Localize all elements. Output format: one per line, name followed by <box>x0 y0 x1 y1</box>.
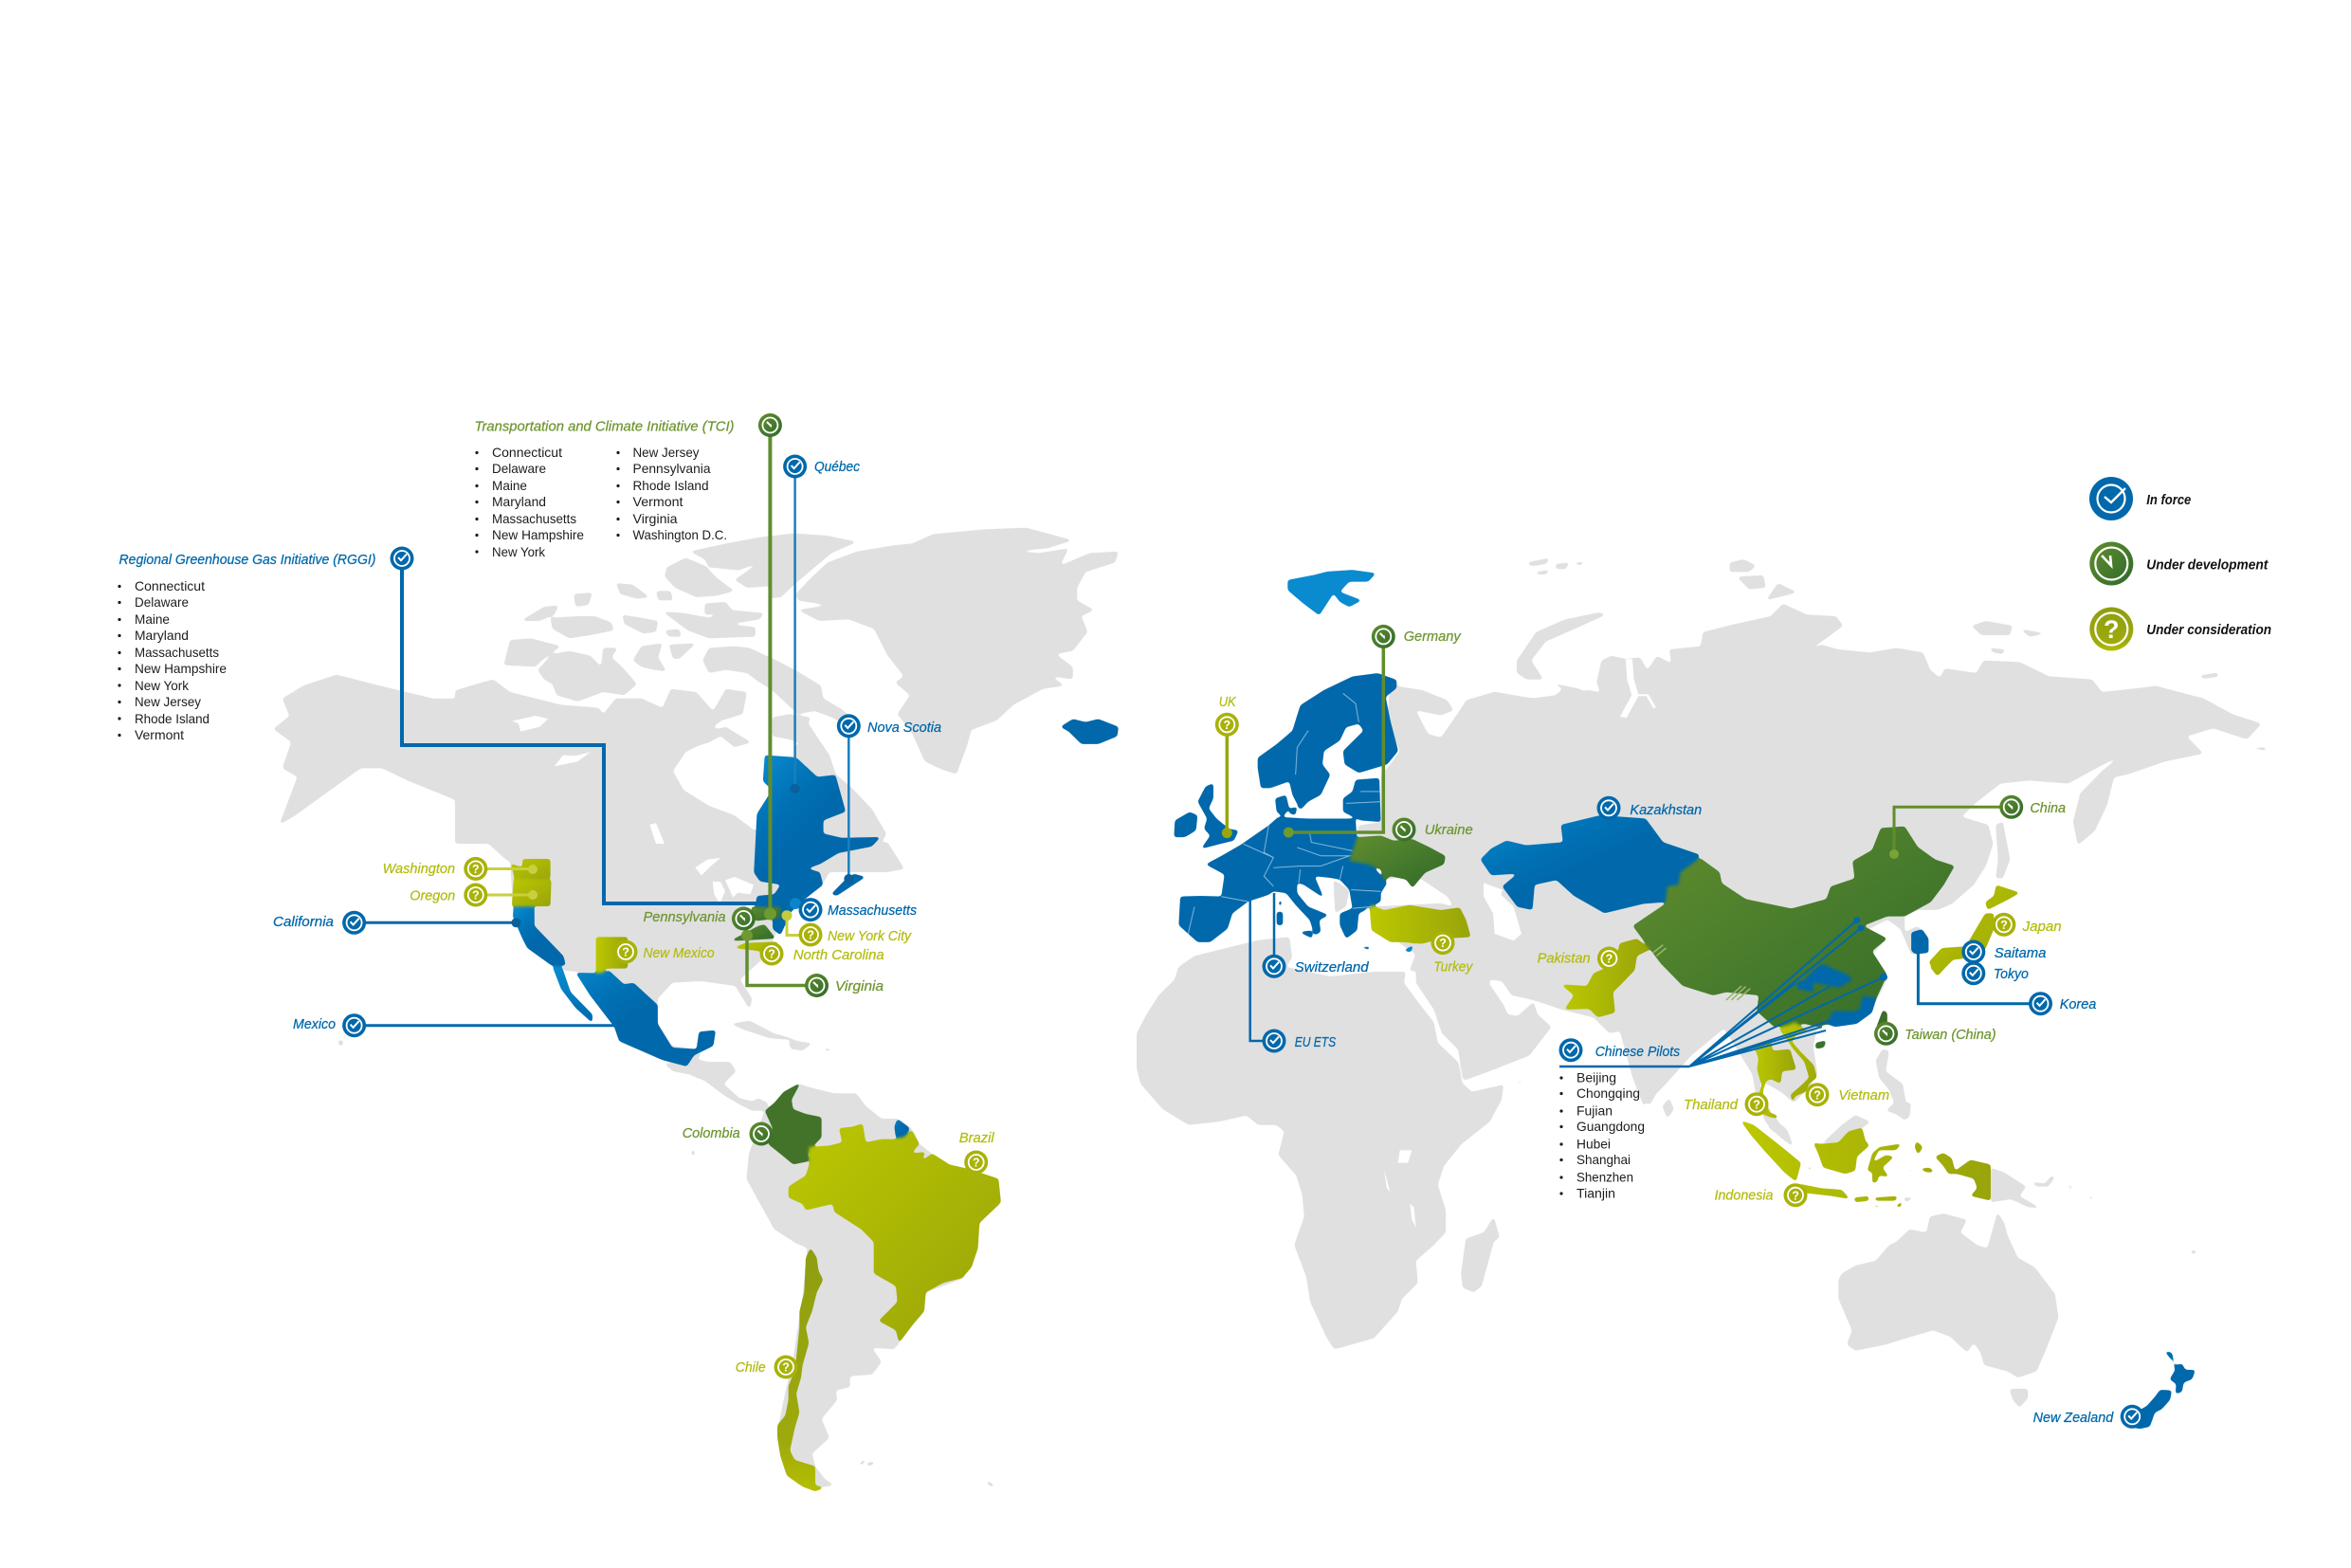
callout: New Zealand: New Zealand <box>2033 1410 2114 1426</box>
callout: Vietnam: Vietnam <box>1838 1087 1889 1103</box>
TCI member list: New Jersey <box>633 445 700 460</box>
callout: Turkey <box>1431 931 1474 975</box>
callout: Oregon: Oregon <box>410 887 455 904</box>
callout: Switzerland <box>1263 893 1369 978</box>
callout: Thailand: Thailand <box>1684 1097 1739 1113</box>
callout: Washington: Washington <box>383 861 455 877</box>
callout: Korea <box>1918 953 2096 1015</box>
region: China <box>1632 827 1955 1049</box>
callout: New Mexico: New Mexico <box>643 945 715 961</box>
TCI member list: Maine <box>492 478 527 493</box>
region: Quebec <box>754 756 881 885</box>
callout: EU ETS <box>1250 896 1336 1052</box>
callout: Saitama: Saitama <box>1995 945 2046 961</box>
callout: UK: UK <box>1219 694 1237 710</box>
callout: New Zealand <box>2033 1405 2144 1429</box>
region: Chile <box>777 1248 825 1491</box>
TCI member list: Washington D.C. <box>633 527 727 542</box>
highlighted regions <box>510 570 2196 1491</box>
callout: Massachusetts: Massachusetts <box>828 903 917 919</box>
region: Korea <box>1911 929 1928 955</box>
callout: Japan: Japan <box>2022 919 2062 935</box>
callout: Quebec: Québec <box>814 459 860 475</box>
RGGI member list: New Hampshire <box>135 661 227 676</box>
callout: Regional Greenhouse Gas Initiative: Regional Greenhouse Gas Initiative (RGGI) <box>119 552 375 568</box>
region: New Mexico <box>596 937 628 974</box>
region: Brazil <box>789 1123 1001 1343</box>
legend: under development <box>2089 542 2269 586</box>
legend: under consideration <box>2089 607 2271 650</box>
region: Vietnam <box>1779 1022 1817 1103</box>
disputed area hatching <box>1653 945 1750 1000</box>
callout: Taiwan (China) <box>1874 1022 1996 1046</box>
callout: Brazil <box>959 1130 994 1174</box>
region: UK <box>1174 783 1239 849</box>
callout: Chile: Chile <box>736 1359 766 1376</box>
RGGI member list: Maine <box>135 611 170 627</box>
world map: grey land masses <box>273 528 2267 1488</box>
RGGI member list: Maryland <box>135 628 189 643</box>
region: Thailand <box>1754 1041 1796 1119</box>
RGGI member list: Rhode Island <box>135 711 210 726</box>
legend: in force <box>2089 477 2191 520</box>
region: Pennsylvania <box>751 907 780 921</box>
region: California <box>513 907 566 965</box>
lakes and inland seas <box>512 716 1522 1228</box>
regions in force: Europe, EU ETS <box>1178 570 1414 953</box>
callout: Japan <box>1992 913 2062 937</box>
callout: Kazakhstan <box>1596 796 1702 820</box>
Chinese pilots list: Beijing <box>1576 1069 1616 1085</box>
region: Taiwan <box>1876 1010 1894 1043</box>
RGGI member list: Connecticut <box>135 578 205 593</box>
callout: Pennsylvania <box>643 906 756 931</box>
Ob and Yenisei estuaries <box>1623 659 1654 718</box>
region: Indonesia <box>1740 1121 1991 1209</box>
region: Iceland <box>1060 719 1119 744</box>
region: Colombia <box>765 1083 822 1173</box>
TCI member list: Vermont <box>633 494 683 509</box>
TCI member list: Delaware <box>492 461 546 476</box>
callout: Vietnam <box>1805 1083 1889 1106</box>
region: Kazakhstan <box>1480 815 1700 913</box>
region: North Carolina <box>733 941 779 960</box>
callout: Indonesia <box>1714 1183 1807 1207</box>
RGGI member list: New Jersey <box>135 694 201 709</box>
callout: Colombia: Colombia <box>683 1125 740 1141</box>
callout: Korea: Korea <box>2060 996 2096 1012</box>
RGGI member list: Vermont <box>135 727 184 742</box>
callout: China: China <box>2030 800 2066 816</box>
callout: Turkey: Turkey <box>1433 959 1474 975</box>
callout: California <box>273 911 521 935</box>
region: Mexico <box>553 966 716 1067</box>
legend: under consideration: Under consideration <box>2146 622 2271 638</box>
TCI member list: Connecticut <box>492 445 562 460</box>
TCI member list: New York <box>492 544 546 559</box>
callout: Chinese Pilots <box>1558 917 1887 1067</box>
callout: New Mexico <box>614 940 715 963</box>
callout: Chinese Pilots: Chinese Pilots <box>1595 1044 1681 1060</box>
region: Nova Scotia <box>831 874 866 896</box>
callout: Nova Scotia: Nova Scotia <box>867 720 941 736</box>
legend: in force: In force <box>2146 492 2191 508</box>
callout: Brazil: Brazil <box>959 1130 994 1146</box>
callout: Thailand <box>1684 1092 1769 1116</box>
region: New England and RGGI states <box>756 869 823 936</box>
callout: Oregon <box>410 884 538 906</box>
region: Washington <box>510 859 551 882</box>
callout: Nova Scotia <box>837 714 941 884</box>
legend: under consideration: ? <box>2104 615 2120 644</box>
callout: Virginia: Virginia <box>835 978 884 994</box>
TCI member list: Rhode Island <box>633 478 709 493</box>
legend <box>2089 477 2271 650</box>
callout: Ukraine <box>1392 817 1473 842</box>
Chinese pilots list: Fujian <box>1576 1103 1613 1119</box>
callout: Tokyo <box>1961 961 2029 985</box>
callout: Transportation and Climate Initiative: Transportation and Climate Initiative (TCI) <box>474 419 735 434</box>
RGGI member list: Massachusetts <box>135 645 219 660</box>
callout: New York City: New York City <box>828 928 912 944</box>
callout: Quebec <box>783 455 860 793</box>
region: Japan <box>1928 884 2020 976</box>
region: Turkey <box>1370 905 1471 944</box>
callout: Pakistan: Pakistan <box>1538 950 1591 967</box>
Chinese pilots list: Guangdong <box>1576 1119 1645 1134</box>
Chinese pilots list: Tianjin <box>1576 1185 1615 1200</box>
callout: UK <box>1215 694 1239 838</box>
callout: Indonesia: Indonesia <box>1714 1187 1773 1204</box>
callout: Switzerland: Switzerland <box>1295 959 1369 975</box>
callout: Colombia <box>683 1122 774 1145</box>
TCI member list: New Hampshire <box>492 527 584 542</box>
callout: Virginia <box>741 930 884 997</box>
callout: North Carolina <box>760 942 884 965</box>
callout: New York City <box>781 910 912 946</box>
callout: China <box>1889 795 2066 859</box>
region: Oregon <box>512 879 552 906</box>
callout: Mexico: Mexico <box>293 1016 336 1032</box>
callout: Regional Greenhouse Gas Initiative <box>119 546 801 909</box>
TCI member list <box>475 445 727 559</box>
region: Chinese pilot provinces <box>1795 964 1876 1027</box>
Chinese pilots list: Hubei <box>1576 1136 1611 1151</box>
TCI member list: Virginia <box>633 511 678 526</box>
region: Virginia <box>732 924 775 941</box>
RGGI member list: Delaware <box>135 594 189 610</box>
region: French Guiana <box>894 1119 910 1138</box>
callout: Massachusetts <box>798 898 917 921</box>
callout: EU ETS: EU ETS <box>1295 1034 1336 1050</box>
callout: Tokyo: Tokyo <box>1994 966 2029 982</box>
callout: Washington <box>383 857 538 881</box>
callout: Ukraine: Ukraine <box>1425 822 1473 838</box>
callout: Pakistan <box>1538 946 1621 971</box>
callout: Pennsylvania: Pennsylvania <box>643 909 726 925</box>
callout: North Carolina: North Carolina <box>793 947 884 963</box>
callout: Mexico <box>293 1013 614 1037</box>
region: New Zealand <box>2123 1351 2196 1429</box>
callout: Germany <box>1284 625 1462 838</box>
RGGI member list: New York <box>135 678 190 693</box>
callout: Kazakhstan: Kazakhstan <box>1630 802 1702 818</box>
callout: Saitama <box>1961 940 2046 963</box>
TCI member list: Maryland <box>492 494 546 509</box>
callout: Taiwan (China): Taiwan (China) <box>1904 1027 1996 1043</box>
Chinese pilots list <box>1559 1069 1645 1200</box>
Chinese pilots list: Chongqing <box>1576 1085 1640 1101</box>
TCI member list: Pennsylvania <box>633 461 711 476</box>
callout: Germany: Germany <box>1404 629 1462 645</box>
TCI member list: Massachusetts <box>492 511 576 526</box>
Chinese pilots list: Shenzhen <box>1576 1170 1633 1185</box>
callout: Transportation and Climate Initiative <box>474 413 782 920</box>
region: Pakistan <box>1560 939 1650 1017</box>
Chinese pilots list: Shanghai <box>1576 1152 1631 1167</box>
region: Ukraine <box>1349 835 1446 888</box>
legend: under development: Under development <box>2146 557 2269 573</box>
RGGI member list <box>118 578 227 742</box>
callout: Chile <box>736 1356 798 1378</box>
callout: California: California <box>273 914 334 930</box>
European country borders <box>1188 693 1381 934</box>
